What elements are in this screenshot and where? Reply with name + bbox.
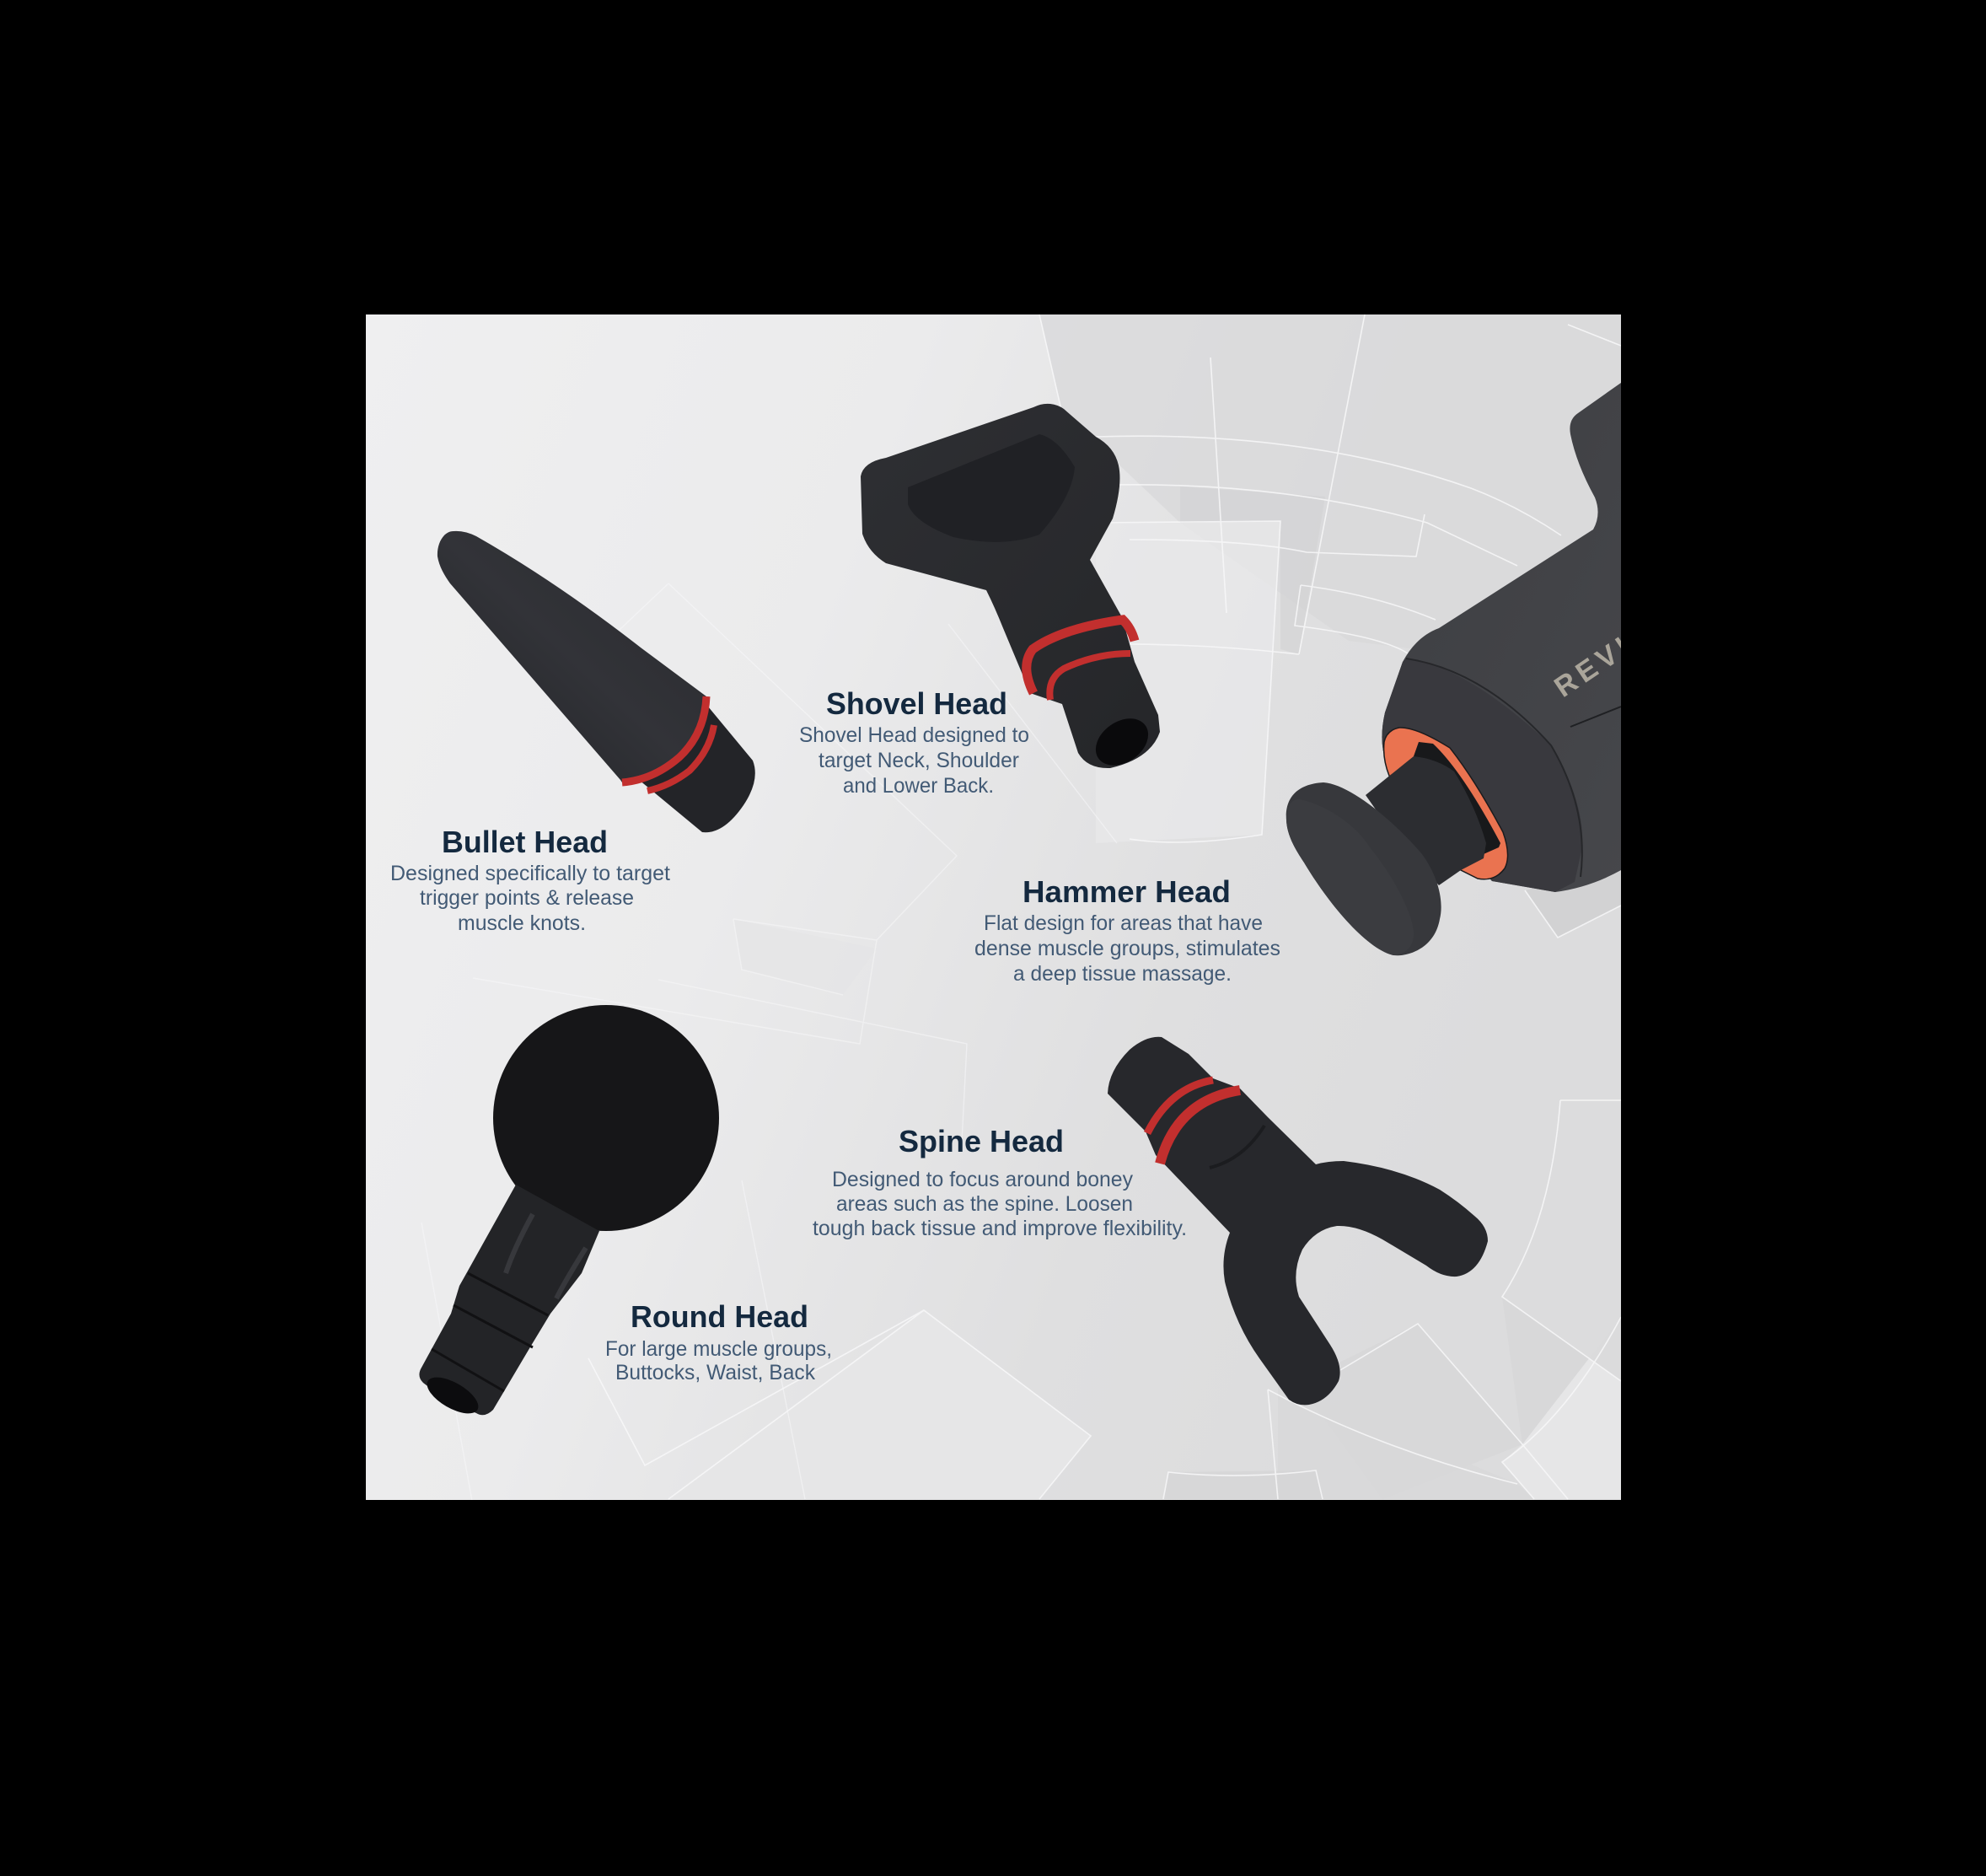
text: bullet head — [390, 825, 670, 935]
logo text: REVI — [1549, 628, 1639, 704]
description — [799, 723, 1029, 798]
icon: spine head attachment — [1108, 1037, 1488, 1405]
text: spine head — [813, 1124, 1187, 1240]
orange collar — [1384, 728, 1508, 879]
description: areas such as the spine. Loosen — [836, 1192, 1133, 1216]
hammer disc — [1286, 782, 1441, 955]
heading: Round Head — [631, 1299, 808, 1334]
description: Shovel Head designed to — [799, 723, 1029, 747]
icon: round head attachment — [419, 1005, 719, 1421]
icon: round connector opening — [421, 1370, 484, 1421]
heading: Bullet Head — [442, 825, 608, 859]
panel: textured background — [366, 314, 1621, 1501]
description: dense muscle groups, stimulates — [974, 937, 1280, 960]
text: hammer head — [974, 874, 1280, 986]
icon: massage gun with hammer head — [1286, 379, 1639, 955]
description: and Lower Back. — [843, 774, 994, 798]
description: Designed to focus around boney — [832, 1168, 1133, 1191]
text: round head — [605, 1299, 832, 1384]
icon: shovel head attachment — [861, 404, 1160, 775]
heading: Hammer Head — [1023, 874, 1231, 909]
description: Buttocks, Waist, Back — [615, 1361, 815, 1384]
heading: Spine Head — [899, 1124, 1064, 1158]
description: a deep tissue massage. — [1013, 962, 1232, 986]
description — [974, 911, 1280, 986]
description: trigger points & release — [420, 886, 634, 910]
icon: shovel connector opening — [1087, 709, 1157, 775]
description — [813, 1168, 1187, 1240]
text: shovel head — [799, 686, 1029, 798]
description — [390, 862, 670, 935]
description: muscle knots. — [458, 911, 586, 935]
description: tough back tissue and improve flexibility. — [813, 1217, 1187, 1240]
description: For large muscle groups, — [605, 1337, 832, 1361]
description: Designed specifically to target — [390, 862, 670, 885]
description — [605, 1337, 832, 1384]
icon: bullet head attachment — [437, 531, 755, 832]
description: Flat design for areas that have — [984, 911, 1263, 935]
heading: Shovel Head — [826, 686, 1007, 721]
description: target Neck, Shoulder — [819, 749, 1019, 772]
